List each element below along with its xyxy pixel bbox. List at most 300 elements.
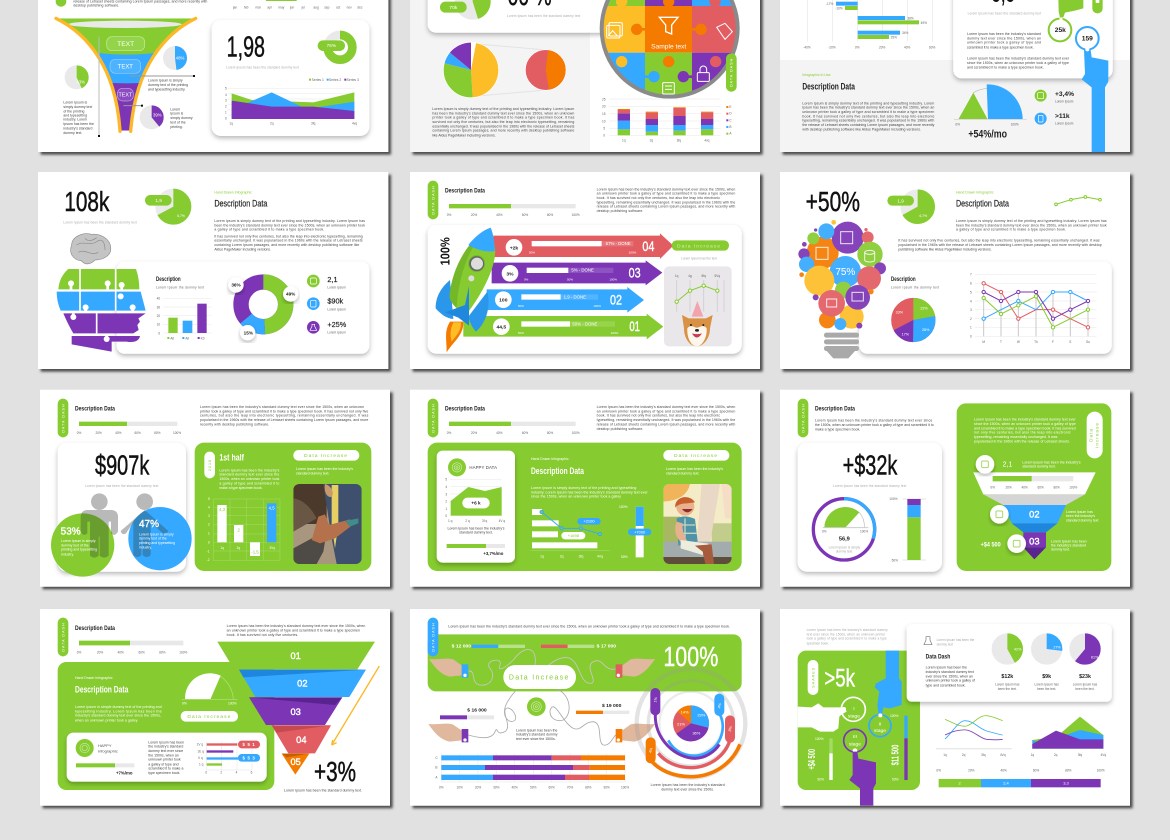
- line chart: 6: [970, 281, 972, 285]
- donut chart: 49%: [286, 292, 296, 297]
- purple hand from below: III: [853, 734, 857, 740]
- card: data dash: type and scrambled book.: [926, 683, 966, 687]
- funnel: 20%: [1006, 485, 1012, 489]
- card: big percent: Lorem Ipsum has been the standard dummy text: [507, 14, 580, 18]
- paragraph: Lorem Ipsum has been the industry's standard dummy text ever since the 1500s, when: [227, 624, 365, 628]
- vertical 100%: 100%: [438, 237, 452, 265]
- legend: Series 3: [347, 78, 359, 82]
- value $4 500: [807, 737, 833, 781]
- paragraph: release of Letraset sheets containing Lorem Ipsum passages, and more recently with: [597, 205, 735, 209]
- title and progress: 80%: [159, 650, 166, 654]
- bars: 1 q: [199, 763, 204, 767]
- area chart: 3: [225, 99, 227, 103]
- bar chart: 0: [158, 331, 160, 335]
- area chart: [225, 87, 357, 126]
- donut chart: 36%: [231, 283, 242, 288]
- title and progress: Description Data: [75, 625, 115, 632]
- leader lines: [98, 37, 195, 137]
- green panel: first half: standard dummy text ever since the: [219, 473, 279, 477]
- green panel: first half: 2018: [208, 459, 212, 471]
- title and progress: [75, 406, 181, 435]
- slide 6: light bulb bubbles and line chart: [780, 172, 1130, 369]
- horizontal bars with line: +2100: [583, 519, 595, 524]
- area chart: +6 k: [471, 501, 481, 506]
- title and progress: [75, 625, 188, 654]
- title and progress: Description Data: [445, 188, 485, 195]
- arrow 04: 67% - DONE: [606, 241, 631, 246]
- arrow 03: [492, 260, 662, 285]
- funnel chart: [56, 17, 197, 133]
- pill labels: 1%: [653, 696, 658, 703]
- stacked bar chart: 25: [602, 97, 606, 101]
- value 108k: 108k: [64, 186, 110, 217]
- circle labels: industry.: [61, 552, 74, 556]
- icon: image: [607, 23, 622, 38]
- circle labels: dummy text of the: [139, 537, 167, 541]
- people seen through circles: [81, 510, 168, 558]
- title and progress: 60%: [522, 431, 528, 435]
- area chart: 4Vq: [1101, 753, 1106, 757]
- pie 42%: $12k: [1001, 674, 1013, 680]
- title and progress: 40%: [115, 431, 122, 435]
- title and progress: 0%: [77, 650, 81, 654]
- funnel notes: 2,1: [1003, 461, 1012, 468]
- stacked horizontal bars: 90%: [604, 785, 610, 789]
- area chart: 1q: [229, 122, 233, 126]
- green panel: first half: 1500s, when an unknown printer took: [219, 477, 280, 481]
- gauge: 0%: [822, 529, 827, 533]
- caption: Lorem Ipsum has been the industry's standard: [651, 783, 725, 787]
- area chart: 4: [225, 93, 227, 97]
- slide 9: gauge and funnel panel: [780, 390, 1130, 587]
- white card: happy infographic: +7%/mo: [116, 770, 133, 775]
- area chart: 2: [445, 500, 447, 504]
- white card: happy infographic: dummy text ever since: [148, 749, 183, 753]
- vertical gauge: +7000: [634, 529, 646, 534]
- stacked bar chart: 0: [603, 134, 605, 138]
- stat +25%: +25%: [327, 320, 347, 329]
- title and text: [815, 406, 934, 431]
- pill labels: 4%: [717, 702, 722, 709]
- paragraph: an unknown printer took a galley of type and scrambled it to make a type specimen: [597, 409, 735, 413]
- month axis: jun: [289, 6, 294, 10]
- data increase pill: [663, 450, 729, 475]
- pie 42%: Lorem Ipsum has: [995, 683, 1020, 687]
- green panel: funnel: popularised in the 1960s with the release of Letraset sheets.: [974, 440, 1070, 444]
- card: +$32k: [798, 443, 942, 572]
- title and progress: 80%: [154, 431, 161, 435]
- card: big percent: [428, 0, 608, 33]
- stacked bar chart: E: [729, 105, 731, 109]
- arrow 03: 3%: [506, 271, 514, 277]
- stacked horizontal bars: B: [435, 766, 437, 770]
- gauge chart: [954, 84, 1027, 126]
- white card: happy data: standard dummy text.: [459, 531, 493, 535]
- paragraph: the release of Letraset sheets containing Lorem Ipsum passages, and more recently: [802, 123, 935, 127]
- pill labels: 4%: [649, 747, 654, 753]
- bar chart: -1: [207, 550, 210, 554]
- white hand from left: stage: [848, 713, 860, 719]
- heading: [956, 190, 1010, 209]
- bar chart: A0: [170, 336, 174, 340]
- diverging bar chart: 49%: [921, 21, 927, 25]
- line chart: S: [1069, 340, 1071, 344]
- title and progress: 20%: [96, 431, 102, 435]
- pie 27%: [1034, 641, 1061, 691]
- title and text: Description Data: [815, 406, 855, 413]
- green panel: [58, 662, 274, 790]
- data increase pill: Lorem Ipsum has been the industry's: [296, 467, 353, 471]
- bars: 4: [236, 770, 238, 774]
- green panel: first half: make a type specimen book.: [219, 486, 263, 490]
- arrow: diagonal: [332, 666, 379, 745]
- pie 48%: [163, 46, 187, 70]
- card: pie and line chart: Description: [891, 277, 916, 283]
- blue hand from top: stage: [874, 728, 886, 734]
- arrow 01: 01: [629, 318, 640, 334]
- green panel: typesetting industry. Lorem Ipsum has been the: [75, 709, 162, 713]
- slide 2: puzzle circle and pies: [410, 0, 760, 152]
- title and text: the 1500s, when an unknown printer took a galley of type and scrambled it to: [815, 423, 934, 427]
- stacked horizontal bars: 50%: [530, 785, 537, 789]
- month axis: nov: [347, 6, 352, 10]
- slide 10: inverted funnel: [40, 609, 390, 806]
- diverging bar chart: 38%: [907, 17, 914, 21]
- stacked horizontal bars: 100%: [621, 785, 629, 789]
- icon circles: [976, 455, 1026, 553]
- paragraph: like Aldus PageMaker including versions.: [432, 133, 496, 137]
- funnel: 40%: [1022, 485, 1028, 489]
- funnel notes: Lorem: [170, 107, 180, 111]
- pie 27%: $9k: [1042, 674, 1051, 680]
- curve line chart: 3fq: [981, 753, 986, 757]
- donut chart: [228, 277, 298, 340]
- title and progress: 40%: [496, 213, 503, 217]
- line chart: 0: [970, 335, 972, 339]
- arrow 03: 50%: [567, 277, 573, 281]
- title and progress: Description Data: [75, 406, 115, 413]
- data dash tag: DATA DASH: [431, 403, 435, 433]
- arrow 01: 100%: [611, 331, 619, 335]
- paragraph: Lorem Ipsum has been the industry's standard dummy text ever since the 1500s, when: [597, 187, 735, 191]
- paragraph: Lorem Ipsum has been the industry's standard dummy text ever since the 1500s, when an unknown: [200, 405, 364, 409]
- green panel: funnel: typesetting, remaining essentially unchanged. It was: [974, 435, 1058, 439]
- white card: happy infographic: HAPPY: [98, 743, 112, 748]
- bar chart: [207, 497, 280, 562]
- white card: happy data: [437, 451, 515, 563]
- card: text and value: since the 1500s, when an unknown printer took a galley of type: [967, 61, 1069, 65]
- gauge: 0%: [182, 702, 187, 706]
- title and text: make a type specimen book.: [815, 427, 860, 431]
- area chart: 4vq: [352, 122, 357, 126]
- paragraph: survived not only five centuries, but also the leap into electronic typesetting, remaining: [432, 120, 574, 124]
- green panel: [428, 443, 742, 571]
- bar chart: 3: [208, 514, 210, 518]
- stacked bar chart: C: [729, 118, 732, 122]
- arrow 01: [463, 314, 663, 339]
- stacked bar chart: 15: [602, 112, 606, 116]
- value $4 500: +$4 500: [807, 749, 818, 770]
- pie: 21%: [677, 722, 685, 727]
- month axis: jul: [301, 6, 305, 10]
- hand: lower left: [428, 724, 468, 742]
- white card: happy infographic: Infographic: [98, 748, 118, 753]
- stacked horizontal bars: 0%: [439, 785, 444, 789]
- value $11 500: $11 500: [890, 744, 901, 765]
- paragraph: It has survived not only five centuries, but also the leap into electronic typesetting, remaining: [214, 234, 363, 238]
- icon: brain: [71, 234, 111, 264]
- paragraph: essentially unchanged. It was popularised in the 1960s with the release of Letraset sheets: [432, 124, 575, 128]
- intro text: took a galley of type and scrambled it to make a type: [807, 637, 887, 641]
- stacked bar chart: 4vq: [704, 139, 710, 143]
- paragraph: with desktop publishing software like Aldus PageMaker including versions.: [802, 127, 921, 131]
- diverging bar chart: 0%: [855, 46, 860, 50]
- value $11 500: 100%: [890, 714, 899, 718]
- big 100%: 100%: [663, 641, 718, 672]
- stacked bar chart: B: [729, 125, 731, 129]
- bulb base: [824, 333, 859, 358]
- paragraph: Lorem Ipsum is simply dummy text of the printing and typesetting industry. Lorem Ipsum has: [214, 219, 365, 223]
- card: 1,98 with area chart: 1,98: [227, 32, 265, 64]
- stacked column: 100%: [889, 497, 898, 501]
- arrow 04: +2k: [510, 245, 518, 251]
- funnel: 60%: [1037, 485, 1044, 489]
- icon: lock: [697, 66, 709, 81]
- center text: Lorem Ipsum has been the: [516, 728, 558, 732]
- ring: [813, 499, 875, 560]
- green panel: SHARES: [811, 667, 815, 688]
- green panel: first half: 1st half: [219, 453, 245, 463]
- paragraph: popularised in the 1960s with the release of Letraset sheets containing Lorem Ipsum passages, and more: [200, 418, 368, 422]
- stacked progress bar: 60%: [1033, 768, 1039, 772]
- white card: happy infographic: Lorem Ipsum has been: [148, 740, 184, 744]
- progress labels top: $ 17 000: [597, 644, 616, 650]
- month axis: sep: [324, 6, 330, 10]
- diverging bar chart: 34%: [902, 31, 909, 35]
- heading: [802, 73, 856, 91]
- icon: flask: [924, 637, 932, 645]
- slide 6: light bulb bubbles and line chart: 75%: [835, 267, 855, 278]
- diverging bar chart: 25%: [891, 35, 897, 39]
- heading: industry. Lorem Ipsum has been the industry's standard dummy text ever: [531, 490, 648, 494]
- small green tag: [1092, 0, 1103, 13]
- stat >11k: [1035, 113, 1074, 126]
- circle labels: 53%: [61, 526, 81, 537]
- green pointing hand and 25k circle: [1049, 0, 1083, 41]
- title and progress: 0%: [447, 213, 451, 217]
- sparkline: [1055, 196, 1101, 206]
- photo: hands: [293, 484, 362, 564]
- white card: happy infographic: [67, 733, 267, 782]
- center text: industry's standard dummy: [516, 733, 558, 737]
- rocket illustration: [436, 228, 495, 352]
- bars: 6: [251, 770, 253, 774]
- ring gauge: [318, 35, 352, 60]
- card: text and value: [953, 0, 1113, 78]
- paragraph: printer took a galley of type and scrambled it to make a type specimen book. It has: [432, 116, 575, 120]
- area chart: 3fq: [311, 122, 316, 126]
- gauge: 100%: [228, 702, 237, 706]
- green panel: Hand Drawn Infographic: [75, 676, 113, 680]
- card: text and value: scrambled it to make a type specimen book.: [967, 45, 1034, 49]
- gauge: [182, 673, 237, 706]
- center text: text ever since the 1500s.: [516, 737, 556, 741]
- line chart: Su: [1086, 340, 1090, 344]
- month axis: oct: [336, 6, 340, 10]
- title and progress: 60%: [522, 213, 528, 217]
- circle labels: printing and typesetting: [61, 548, 97, 552]
- exploded pie chart: [525, 49, 566, 91]
- funnel notes: simply dummy: [170, 116, 193, 120]
- dog photo with line chart: 1q: [675, 274, 679, 278]
- pie 42%: been the text.: [998, 687, 1017, 691]
- bars: $ 5 1: [243, 742, 255, 747]
- value $11 500: 50%: [892, 777, 899, 781]
- pie 27%: Lorem Ipsum has: [1034, 683, 1059, 687]
- arrow 03: 100%: [609, 277, 617, 281]
- card: text and value: Lorem Ipsum has been the industry's standard dummy text ever: [967, 57, 1070, 61]
- value +3%: [284, 756, 362, 793]
- heading: [531, 457, 648, 499]
- funnel notes: the industry's standard: [1051, 543, 1086, 547]
- title and progress: 80%: [547, 213, 553, 217]
- title and progress: [445, 188, 580, 217]
- area chart: 1: [445, 507, 447, 511]
- bars: 1E q: [197, 749, 204, 753]
- title and progress: 100%: [572, 213, 580, 217]
- paragraph: recently with desktop publishing software.: [200, 423, 269, 427]
- card: +$32k: Lorem Ipsum has been the standard dummy text: [833, 484, 906, 488]
- blue circle 47%: [128, 507, 192, 570]
- stacked progress bar: 2,4: [1003, 781, 1010, 786]
- center text: [516, 728, 558, 741]
- area chart: 3f q: [482, 519, 488, 523]
- card: text and value: Lorem Ipsum has been the standard dummy text: [968, 11, 1041, 15]
- paragraph: book. It has survived not only five centuries, but also the leap into electronic: [802, 114, 935, 118]
- pie with pill: 6,7%: [920, 214, 927, 218]
- pie with pill: [887, 196, 927, 218]
- title and progress: 20%: [471, 431, 477, 435]
- concentric radial chart: [637, 669, 745, 778]
- title and progress: 40%: [496, 431, 503, 435]
- dog photo with line chart: 8fq: [701, 274, 706, 278]
- gauge: dummy text.: [836, 550, 853, 554]
- line chart: Th: [1034, 340, 1038, 344]
- horizontal bars with line: 4Vq: [597, 555, 603, 559]
- pie: [677, 710, 706, 735]
- gauge: 56,9: [839, 536, 850, 542]
- card: pie and line chart: Lorem Ipsum the dummy text: [891, 285, 939, 289]
- data dash tag: [726, 53, 737, 92]
- stacked bar chart: 2q: [650, 139, 653, 143]
- paragraph: centuries, but also the leap into electronic typesetting, remaining essentially unchanged. It was: [200, 414, 369, 418]
- bar chart: 40: [157, 297, 160, 301]
- paragraph: [898, 219, 1107, 252]
- progress $ 19 000: $ 19 000: [602, 703, 622, 709]
- vertical gauge: 100%: [619, 505, 628, 509]
- title and progress: 100%: [173, 431, 181, 435]
- value $4 500: 50%: [817, 777, 824, 781]
- value 108k: [63, 186, 137, 225]
- title and progress: 0%: [447, 431, 451, 435]
- line chart: [970, 273, 1097, 344]
- green panel: funnel: Increase: [1095, 422, 1100, 448]
- bars: [197, 741, 260, 774]
- icon: fingerprint: [527, 697, 546, 716]
- progress $ 19 000: [576, 703, 629, 714]
- blue hand from top: II: [879, 721, 881, 727]
- people icons: [81, 493, 168, 558]
- line chart: 1: [970, 326, 972, 330]
- bar chart: 20: [157, 314, 160, 318]
- pie 48%: 48%: [176, 55, 184, 60]
- card: big percent: 70k: [449, 5, 458, 11]
- card: $907k with people: Lorem Ipsum has been the standard dummy text: [85, 484, 158, 488]
- stacked horizontal bars: 10%: [457, 785, 463, 789]
- photo: laughing child: [663, 484, 732, 564]
- area chart: 4: [445, 485, 447, 489]
- head puzzle: [57, 269, 146, 352]
- stacked bar chart: 3fq: [677, 139, 681, 143]
- stacked horizontal bars: A: [435, 775, 438, 779]
- line chart: 4: [970, 299, 972, 303]
- white card: happy infographic: unknown printer took: [148, 758, 181, 762]
- stacked horizontal bars: 40%: [512, 785, 518, 789]
- area chart: 2q: [1054, 753, 1058, 757]
- blue hand from top: [869, 651, 902, 737]
- funnel notes: [63, 79, 193, 135]
- bars: 0: [205, 770, 207, 774]
- paragraph: Lorem Ipsum is simply dummy text of the printing and typesetting industry. Lorem Ipsum: [432, 107, 574, 111]
- bar chart: 10: [157, 323, 160, 327]
- horizontal bars with line: +1698: [568, 533, 580, 538]
- paragraph: Ipsum has been the industry's standard dummy text ever since the 1500s, when an: [802, 106, 934, 110]
- big pie chart: [443, 42, 546, 98]
- blue pointing hand and 159 circle: [1076, 27, 1108, 152]
- gauge: [822, 507, 868, 554]
- data dash tag: [798, 399, 808, 437]
- stacked bar chart: A: [729, 132, 732, 136]
- value +3%: +3%: [314, 756, 356, 787]
- area chart: 0: [445, 514, 447, 518]
- funnel notes: standard dummy text: [1066, 519, 1099, 523]
- stacked progress bar: 20%: [968, 768, 975, 772]
- area chart: 2 q: [465, 519, 470, 523]
- stat +3,4%: +3,4%: [1055, 91, 1074, 98]
- arrow 03: 0%: [524, 277, 529, 281]
- paragraph: desktop publishing software.: [597, 209, 643, 213]
- green panel: when an unknown printer took a galley.: [75, 718, 138, 722]
- card: data dash: [907, 624, 1112, 702]
- green panel: >5k: [824, 666, 855, 693]
- stacked progress bar: [936, 768, 1105, 787]
- wires: [468, 650, 616, 685]
- bars: 1V q: [197, 743, 203, 747]
- paragraph: essentially unchanged. It was popularised in the 1960s with the release of Letraset sheets: [214, 239, 363, 243]
- pie: 14%: [681, 710, 689, 715]
- value +3%: Lorem Ipsum has been the standard dummy text.: [284, 789, 362, 793]
- line chart: W: [1017, 340, 1020, 344]
- line chart: 2: [970, 317, 972, 321]
- title and progress: 100%: [179, 650, 188, 654]
- title and progress: 60%: [135, 431, 141, 435]
- stacked horizontal bars: C: [435, 756, 438, 760]
- progress $ 16 000: $ 16 000: [467, 707, 487, 713]
- arrow 04: [493, 233, 673, 259]
- value $4 500: 100%: [815, 737, 824, 741]
- arrow 02: [487, 287, 644, 313]
- card: description, bars, donut: Description: [156, 277, 181, 283]
